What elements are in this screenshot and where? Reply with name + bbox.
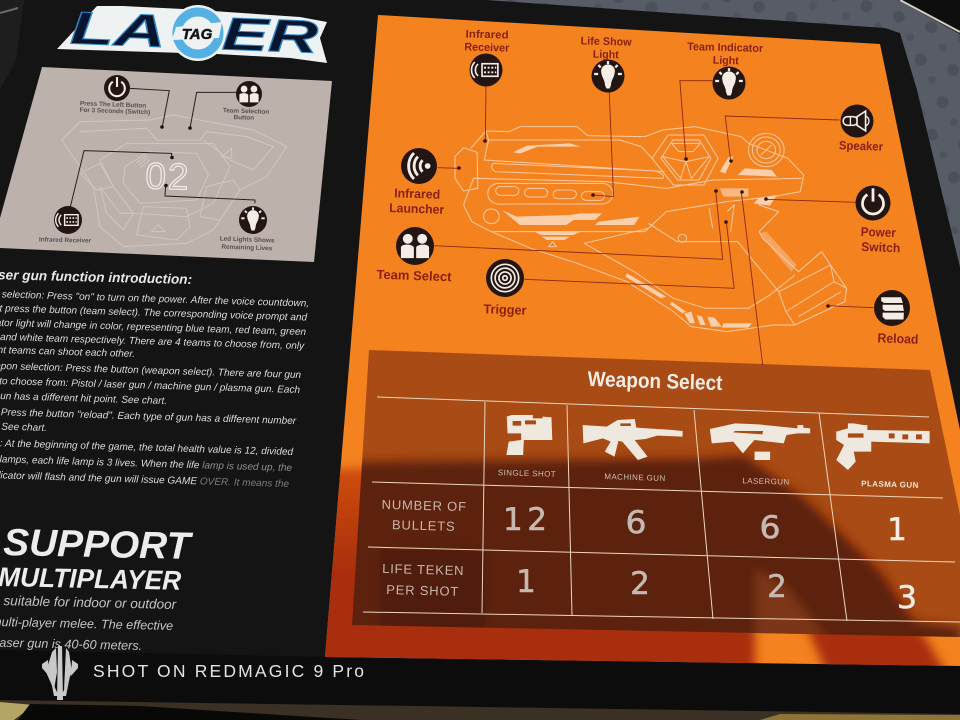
label: infrared launcher: Launcher	[389, 201, 445, 217]
values: life taken per shot: 3	[897, 580, 917, 616]
weapon names: MACHINE GUN	[604, 472, 666, 483]
heading: support multiplayer: SUPPORT	[3, 522, 193, 568]
watermark text: SHOT ON REDMAGIC 9 Pro	[93, 661, 365, 681]
watermark logo	[42, 646, 78, 700]
label: infrared receiver: Receiver	[464, 41, 510, 55]
pointer dots	[457, 139, 830, 308]
label: trigger: Trigger	[483, 301, 527, 318]
row header: number of bullets	[381, 497, 467, 534]
weapon icons	[506, 415, 930, 470]
caption: power button: Press The Left Button	[80, 100, 146, 110]
vest line drawing	[62, 115, 287, 247]
icon: infrared receiver	[470, 54, 502, 86]
weapon names: LASERGUN	[742, 476, 790, 487]
label: infrared receiver	[464, 28, 510, 55]
background: grey fabric surface	[486, 0, 960, 267]
caption: led lights	[219, 236, 275, 252]
row header: life taken per shot: PER SHOT	[386, 582, 459, 599]
values: life taken per shot: 2	[630, 566, 650, 602]
values: life taken per shot: 2	[767, 569, 787, 605]
icon: lasergun	[710, 423, 810, 460]
icon: infrared receiver	[54, 206, 82, 234]
text block: function introduction	[0, 289, 309, 490]
panel: orange instructions	[325, 15, 960, 666]
icon: plasma gun	[836, 423, 930, 470]
values: life taken per shot: 1	[516, 564, 536, 600]
logo: Laser Tag: LA	[69, 1, 167, 57]
background: surface below the box	[0, 700, 960, 720]
label: speaker: Speaker	[839, 138, 884, 154]
values: number of bullets	[503, 502, 907, 548]
caption: team selection: Button	[233, 114, 254, 122]
table heading: Weapon Select: Weapon Select	[587, 368, 723, 395]
icon: speaker	[840, 104, 874, 138]
gun line drawing	[455, 127, 847, 332]
values: life taken per shot	[516, 564, 917, 616]
icon: infrared launcher	[401, 148, 437, 184]
table grid	[363, 397, 960, 622]
label: power switch: Switch	[861, 240, 900, 255]
row header: life taken per shot	[381, 561, 465, 599]
values: number of bullets: 1	[887, 512, 907, 548]
icon: machine gun	[583, 419, 683, 460]
gun highlights	[502, 143, 797, 328]
sun shadow on orange	[300, 455, 950, 680]
icon: team indicator light	[712, 66, 746, 100]
label: infrared launcher: Infrared	[394, 186, 440, 202]
values: number of bullets: 12	[503, 502, 547, 538]
weapon names: PLASMA GUN	[861, 479, 919, 490]
icon: led lights	[239, 206, 267, 234]
label: life show light: Life Show	[580, 35, 632, 49]
label: team indicator light: Team Indicator	[687, 41, 764, 55]
label: infrared receiver: Infrared	[465, 28, 509, 42]
label: infrared launcher	[389, 186, 445, 217]
label: life show light	[580, 35, 632, 62]
background: dark lower band of the box	[0, 650, 960, 714]
logo: Laser Tag: TAG	[182, 26, 213, 43]
sun shadow on table	[352, 450, 960, 637]
caption: power button	[79, 100, 151, 116]
label: power switch	[860, 225, 901, 255]
caption: infrared receiver: Infrared Receiver	[39, 236, 92, 245]
label: life show light: Light	[593, 49, 619, 61]
label: team select: Team Select	[376, 267, 452, 284]
icon: power switch	[856, 186, 890, 220]
icon: team select	[396, 227, 434, 265]
gun outline	[455, 127, 847, 332]
row header: number of bullets: NUMBER OF	[381, 497, 467, 514]
heading: support multiplayer	[0, 522, 193, 596]
logo: Laser Tag: ER	[221, 7, 319, 63]
text block: multiplayer description	[0, 593, 177, 653]
icon: reload	[874, 290, 910, 326]
icon: trigger	[486, 259, 524, 297]
pointer lines	[70, 88, 255, 208]
panel: wearable vest diagram	[0, 67, 332, 262]
background: top left corner reflection	[0, 0, 24, 90]
label: team indicator light: Light	[713, 55, 739, 67]
values: number of bullets: 6	[760, 510, 780, 546]
icon: single shot pistol	[506, 415, 552, 455]
weapon names: SINGLE SHOT	[498, 468, 556, 479]
caption: team selection	[223, 107, 269, 122]
row header: number of bullets: BULLETS	[392, 517, 456, 534]
pointer lines to gun parts	[434, 81, 873, 365]
caption: led lights: Remaining Lives	[221, 244, 273, 252]
label: reload: Reload	[877, 330, 919, 347]
panel: weapon table background	[352, 350, 960, 637]
label: team indicator light	[687, 41, 764, 68]
display digits: 02	[145, 155, 191, 198]
icon: team	[236, 81, 262, 107]
icon: life show light	[592, 60, 624, 92]
values: number of bullets: 6	[626, 505, 646, 541]
label: power switch: Power	[861, 225, 896, 240]
background: dark object in top right corner	[898, 0, 960, 34]
row header: life taken per shot: LIFE TEKEN	[382, 561, 465, 578]
logo: Laser Tag	[57, 1, 327, 63]
caption: power button: For 3 Seconds (Switch)	[79, 107, 150, 116]
heading: support multiplayer: MULTIPLAYER	[0, 562, 182, 596]
caption: team selection: Team Selection	[223, 107, 269, 116]
icon: power	[104, 75, 130, 101]
weapon names	[498, 468, 919, 490]
caption: led lights: Led Lights Shows	[220, 236, 275, 244]
